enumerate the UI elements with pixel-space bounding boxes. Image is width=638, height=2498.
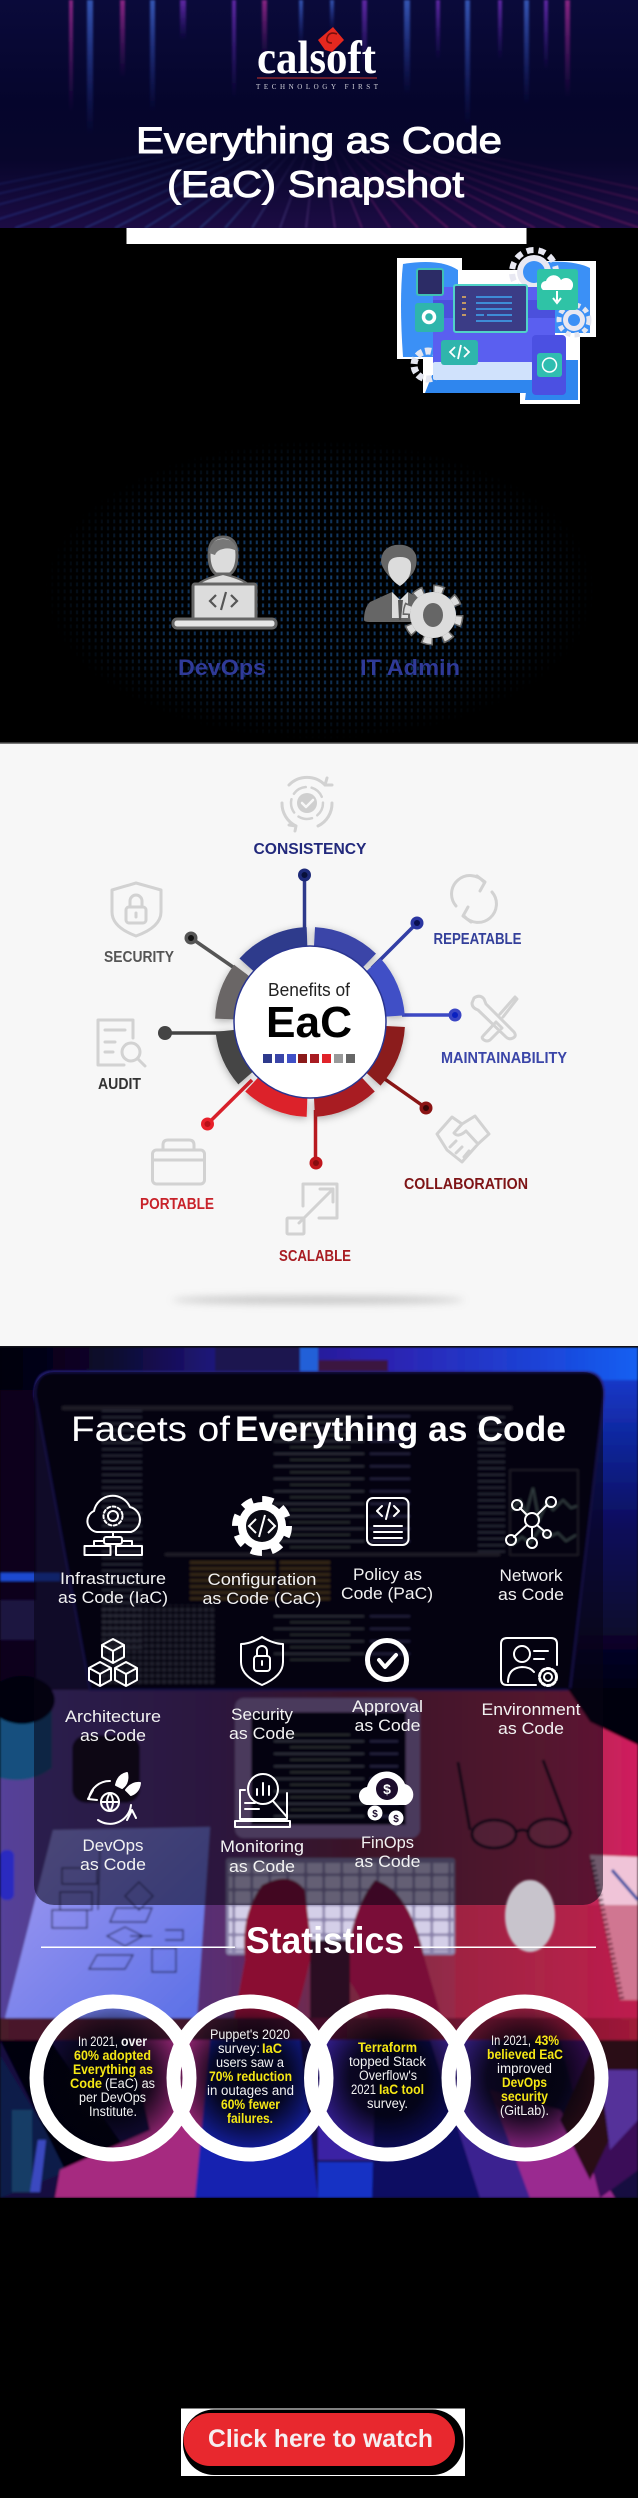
stat: terraform: IaC tool xyxy=(379,2082,424,2097)
desk xyxy=(0,1690,638,2040)
facet: architecture as code: as Code xyxy=(80,1726,146,1745)
chart xyxy=(510,1470,578,1555)
heading: statistics: Statistics xyxy=(246,1920,404,1961)
label: consistency: CONSISTENCY xyxy=(254,841,367,858)
stat: gitlab: 43% xyxy=(535,2033,559,2048)
phone xyxy=(532,335,566,395)
logo wordmark: calsoft xyxy=(257,32,376,84)
code tile xyxy=(441,340,478,365)
icon: repeatable xyxy=(452,876,496,922)
stat: 60% adopted: (EaC) as xyxy=(105,2076,155,2091)
facet: security as code xyxy=(229,1637,295,1743)
stat: gitlab xyxy=(487,2033,563,2118)
stat: 60% adopted: 60% adopted xyxy=(74,2048,151,2063)
stat: puppet survey: survey: xyxy=(218,2041,260,2056)
connector: repeatable xyxy=(372,916,424,968)
facet: devops as code: as Code xyxy=(80,1855,146,1874)
notebook xyxy=(590,1855,638,2000)
mouse xyxy=(505,1880,555,1952)
gear tile xyxy=(415,303,444,332)
facet: network as code: Network xyxy=(500,1566,563,1585)
stat: 60% adopted: In 2021, xyxy=(78,2034,118,2049)
logo tagline: TECHNOLOGY FIRST xyxy=(256,83,379,91)
facet: policy as code: Policy as xyxy=(353,1565,422,1584)
heading: EaC: EaC xyxy=(266,998,352,1047)
ground shadow xyxy=(172,1296,464,1304)
facet: architecture as code xyxy=(65,1639,161,1745)
stat: puppet survey: IaC xyxy=(262,2041,282,2056)
button: click here to watch xyxy=(181,2408,465,2476)
label: IT Admin: IT Admin xyxy=(360,655,460,680)
photo background: laptop desk xyxy=(0,1347,638,2198)
white cutout backing xyxy=(397,258,596,404)
icon: cubes xyxy=(89,1639,137,1686)
heading: facets of everything as code: Facets of xyxy=(71,1410,230,1449)
icon: money cloud xyxy=(359,1772,413,1826)
connector: scalable xyxy=(310,1110,322,1170)
heading: Benefits of: Benefits of xyxy=(268,980,351,1000)
label: audit: AUDIT xyxy=(98,1076,141,1093)
icon: lock shield xyxy=(241,1637,283,1685)
stat: gitlab: DevOps xyxy=(502,2075,547,2090)
facet: monitoring as code xyxy=(220,1774,304,1876)
facet: infrastructure as code xyxy=(58,1496,168,1607)
icon: portable case xyxy=(152,1140,204,1184)
stat: terraform: survey. xyxy=(367,2096,408,2111)
ide panels xyxy=(101,1410,144,1650)
facet: monitoring as code: Monitoring xyxy=(220,1837,304,1856)
stat: 60% adopted xyxy=(70,2034,155,2119)
connector: maintainability xyxy=(402,1008,462,1022)
gear xyxy=(407,589,459,641)
icon: cloud network xyxy=(84,1496,142,1555)
facet: finops as code xyxy=(354,1772,420,1871)
label: DevOps: DevOps xyxy=(178,655,266,680)
label: collaboration: COLLABORATION xyxy=(404,1176,528,1193)
laptop base wedge xyxy=(567,1688,638,1745)
facet: finops as code: as Code xyxy=(354,1852,420,1871)
stat: puppet survey: in outages and xyxy=(207,2083,294,2098)
title: (EaC) Snapshot xyxy=(167,164,465,205)
icon: audit xyxy=(98,1020,145,1066)
head xyxy=(209,537,237,574)
shoulders xyxy=(198,574,248,584)
facet: policy as code xyxy=(341,1498,433,1603)
facet: environment as code: as Code xyxy=(498,1719,564,1738)
icon: security shield xyxy=(112,883,161,936)
facet: infrastructure as code: as Code (IaC) xyxy=(58,1588,168,1607)
stat: 60% adopted: over xyxy=(121,2034,148,2049)
small blue object xyxy=(0,1850,14,1900)
facets overlay panel xyxy=(34,1372,603,1905)
icon: IT Admin xyxy=(364,545,459,641)
stat: 60% adopted: Code xyxy=(70,2076,102,2091)
stat: puppet survey xyxy=(207,2027,294,2126)
stat: terraform: 2021 xyxy=(351,2082,376,2097)
hair and head xyxy=(381,545,417,579)
connector: collaboration xyxy=(372,1070,432,1114)
facet: approval as code: as Code xyxy=(354,1716,420,1735)
stat: terraform xyxy=(349,2040,426,2111)
binary dot matrix background xyxy=(58,446,580,733)
label: security: SECURITY xyxy=(104,949,175,966)
mugs xyxy=(0,1710,52,1781)
title: Everything as Code xyxy=(136,120,502,161)
facet: devops as code: DevOps xyxy=(82,1836,144,1855)
heading: facets of everything as code: Everything as Code xyxy=(235,1410,566,1449)
facet: configuration as code xyxy=(202,1501,322,1608)
facet: configuration as code: Configuration xyxy=(208,1570,316,1589)
stat: gitlab: improved xyxy=(497,2061,552,2076)
ring of eight segments xyxy=(225,937,395,1107)
stat: puppet survey: users saw a xyxy=(216,2055,284,2070)
illustration: developer screens xyxy=(397,250,596,404)
panel: benefits of EaC xyxy=(0,742,638,1346)
icon: money cloud: $ xyxy=(372,1809,378,1820)
white bar xyxy=(126,228,526,244)
facet: network as code: as Code xyxy=(498,1585,564,1604)
facet: devops as code xyxy=(80,1773,146,1874)
stat: gitlab: believed EaC xyxy=(487,2047,563,2062)
stat: gitlab: security xyxy=(501,2089,548,2104)
icon: code document xyxy=(367,1498,408,1545)
stat: puppet survey: 60% fewer xyxy=(221,2097,281,2112)
connector: portable xyxy=(201,1080,252,1130)
icon: code gear xyxy=(237,1501,287,1551)
facet: configuration as code: as Code (CaC) xyxy=(202,1589,322,1608)
doc tile xyxy=(417,269,443,295)
icon: globe with leaves xyxy=(88,1773,140,1824)
cloud tile xyxy=(537,269,578,310)
icon: check circle xyxy=(368,1640,406,1680)
icon: DevOps engineer xyxy=(173,537,276,628)
logo: calsoft xyxy=(256,27,379,91)
facet: policy as code: Code (PaC) xyxy=(341,1584,433,1603)
icon: money cloud: $ xyxy=(383,1781,391,1797)
stat: puppet survey: failures. xyxy=(227,2111,273,2126)
stat: 60% adopted: Everything as xyxy=(73,2062,153,2077)
icon: laptop magnifier xyxy=(235,1774,290,1827)
keyboard xyxy=(226,1858,455,1955)
glasses xyxy=(458,1760,571,1848)
facet: environment as code: Environment xyxy=(482,1700,581,1719)
facet: architecture as code: Architecture xyxy=(65,1707,161,1726)
stat: 60% adopted: per DevOps xyxy=(79,2090,146,2105)
facet: finops as code: FinOps xyxy=(361,1833,414,1852)
colour squares xyxy=(263,1054,355,1063)
stat: terraform: topped Stack xyxy=(349,2054,426,2069)
stat: terraform: Terraform xyxy=(358,2040,417,2055)
stat: gitlab: In 2021, xyxy=(491,2033,531,2048)
icon: network hub xyxy=(506,1497,556,1548)
tablet xyxy=(235,1698,420,1838)
facet: infrastructure as code: Infrastructure xyxy=(60,1569,166,1588)
connector: audit xyxy=(158,1026,228,1040)
icon: id card gear xyxy=(501,1638,557,1686)
stat: terraform: Overflow's xyxy=(359,2068,417,2083)
laptop xyxy=(193,584,256,620)
icon: maintainability tools xyxy=(472,996,517,1041)
blue blobs xyxy=(401,262,458,357)
paper xyxy=(5,1827,210,2018)
icon: consistency xyxy=(282,777,332,831)
rings: statistics circles xyxy=(36,2002,602,2154)
stat: 60% adopted: Institute. xyxy=(89,2104,137,2119)
facet: network as code xyxy=(498,1497,564,1604)
monitor xyxy=(433,287,555,363)
centre disc xyxy=(234,946,386,1098)
top band xyxy=(0,1348,638,1391)
facet: security as code: Security xyxy=(231,1705,293,1724)
button: click here to watch: Click here to watch xyxy=(208,2425,433,2453)
facet: monitoring as code: as Code xyxy=(229,1857,295,1876)
header banner xyxy=(0,0,638,228)
icon: logo mark xyxy=(318,27,344,52)
icon: money cloud: $ xyxy=(393,1814,399,1825)
facet: approval as code: Approval xyxy=(352,1697,423,1716)
icon: collaboration handshake xyxy=(437,1116,489,1162)
hands and arms xyxy=(234,1878,312,2020)
stat: gitlab: (GitLab). xyxy=(500,2103,549,2118)
label: scalable: SCALABLE xyxy=(279,1248,351,1265)
label: maintainability: MAINTAINABILITY xyxy=(441,1050,568,1067)
facet: environment as code xyxy=(482,1638,581,1738)
title xyxy=(136,120,502,205)
gears xyxy=(414,250,589,379)
facet: approval as code xyxy=(352,1640,423,1735)
connector: security xyxy=(184,932,246,976)
heading: facets of everything as code xyxy=(71,1410,566,1449)
stat: puppet survey: Puppet's 2020 xyxy=(210,2027,290,2042)
connector: consistency xyxy=(298,868,311,930)
desk front xyxy=(0,2018,638,2042)
label: repeatable: REPEATABLE xyxy=(434,931,522,948)
facet: security as code: as Code xyxy=(229,1724,295,1743)
suit xyxy=(364,592,422,622)
stat: puppet survey: 70% reduction xyxy=(209,2069,292,2084)
icon: scalable xyxy=(287,1184,337,1234)
laptop body xyxy=(35,1372,604,1690)
legs and floor xyxy=(0,2040,638,2198)
label: portable: PORTABLE xyxy=(140,1196,214,1213)
